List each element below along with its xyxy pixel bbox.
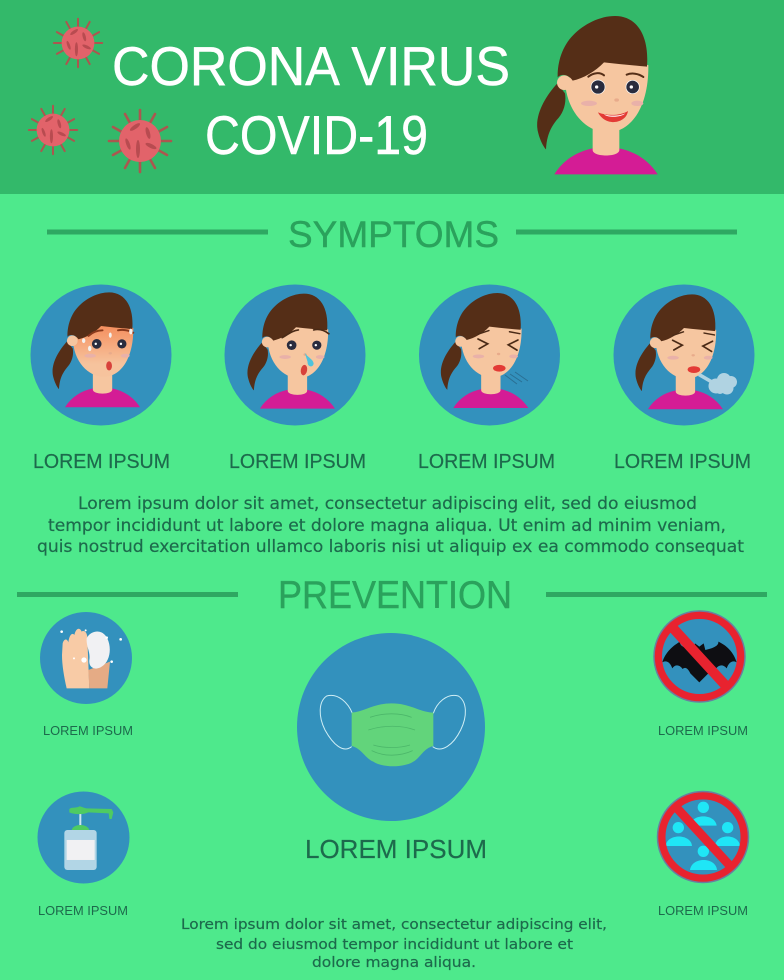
icon: no bats bbox=[654, 610, 746, 702]
symptoms description: quis nostrud exercitation ullamco laboris nisi ut aliquip ex ea commodo consequat bbox=[37, 537, 745, 556]
symptom labels: LOREM IPSUM bbox=[418, 451, 555, 473]
spray lines bbox=[505, 372, 528, 384]
symptom: fever bbox=[30, 284, 172, 426]
prevention heading bbox=[17, 574, 767, 617]
label: face mask: LOREM IPSUM bbox=[305, 834, 487, 864]
symptom: coughing bbox=[614, 284, 754, 426]
prevention description: dolore magna aliqua. bbox=[312, 955, 476, 971]
icon: hand sanitizer bbox=[38, 792, 130, 884]
label: hand sanitizer: LOREM IPSUM bbox=[38, 903, 128, 918]
smiling woman portrait bbox=[537, 16, 658, 174]
icon: face mask bbox=[297, 633, 485, 821]
symptom labels: LOREM IPSUM bbox=[33, 451, 170, 473]
prevention description bbox=[181, 917, 607, 971]
symptoms heading bbox=[47, 214, 737, 255]
virus icons bbox=[29, 19, 171, 172]
symptom: runny nose bbox=[224, 284, 366, 426]
label: no bats: LOREM IPSUM bbox=[658, 723, 748, 738]
prevention description: Lorem ipsum dolor sit amet, consectetur adipiscing elit, bbox=[181, 917, 607, 933]
symptoms heading: SYMPTOMS bbox=[288, 214, 499, 255]
symptoms description bbox=[37, 494, 745, 556]
prevention description: sed do eiusmod tempor incididunt ut labore et bbox=[216, 937, 573, 953]
symptoms description: tempor incididunt ut labore et dolore magna aliqua. Ut enim ad minim veniam, bbox=[48, 516, 726, 535]
symptom labels: LOREM IPSUM bbox=[614, 451, 751, 473]
title: COVID-19 bbox=[205, 104, 428, 166]
symptom labels bbox=[33, 451, 751, 473]
title bbox=[112, 35, 510, 166]
symptom labels: LOREM IPSUM bbox=[229, 451, 366, 473]
cough cloud bbox=[698, 373, 737, 394]
title: CORONA VIRUS bbox=[112, 35, 510, 97]
symptoms description: Lorem ipsum dolor sit amet, consectetur adipiscing elit, sed do eiusmod bbox=[78, 494, 697, 513]
prevention heading: PREVENTION bbox=[278, 574, 512, 617]
icon: no crowds bbox=[657, 791, 749, 883]
header band bbox=[0, 0, 784, 194]
icon: hand washing bbox=[40, 612, 132, 704]
symptom: sneezing bbox=[419, 284, 560, 426]
label: no crowds: LOREM IPSUM bbox=[658, 903, 748, 918]
label: hand washing: LOREM IPSUM bbox=[43, 723, 133, 738]
